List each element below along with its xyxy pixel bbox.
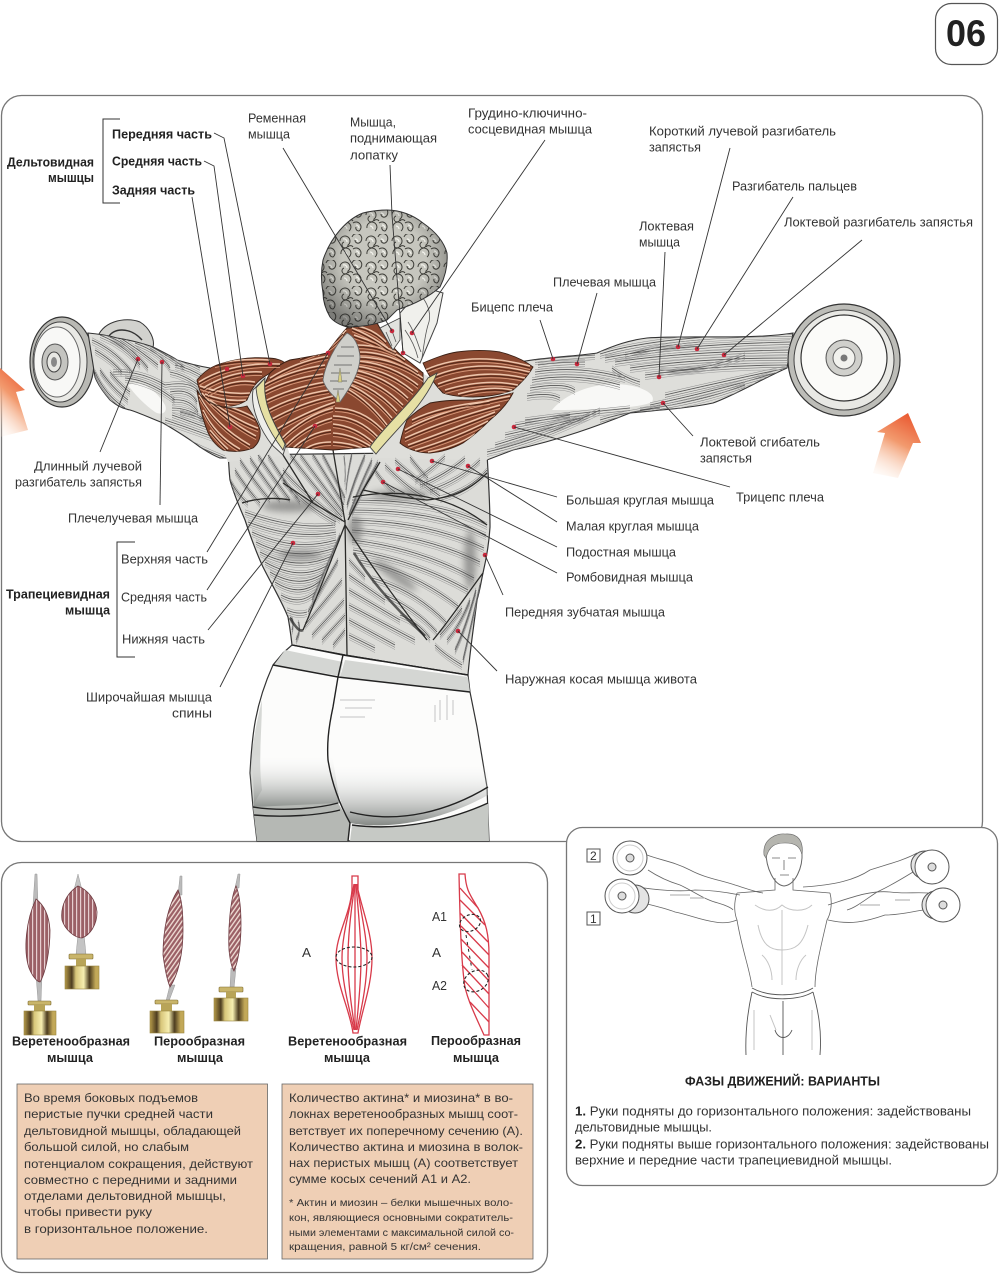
labels: deltoid: Передняя часть bbox=[112, 126, 212, 142]
labels: trapezius: мышца bbox=[65, 602, 111, 618]
trapezius muscle bbox=[262, 323, 423, 450]
heading: movement phases: ФАЗЫ ДВИЖЕНИЙ: ВАРИАНТЫ bbox=[685, 1074, 880, 1088]
text box: actin and myosin: сумме косых сечений А1 и А2. bbox=[289, 1172, 471, 1186]
arms position 2 bbox=[647, 853, 917, 910]
captions: muscle types: Перообразная bbox=[154, 1034, 245, 1048]
text box: actin and myosin: кращения, равной 5 кг/см² сечения. bbox=[289, 1242, 481, 1253]
left deltoid bbox=[197, 358, 285, 451]
number box 1 bbox=[587, 912, 600, 926]
torso shading bbox=[260, 486, 480, 594]
right arm bbox=[470, 333, 793, 460]
muscle fibres brown bbox=[199, 326, 530, 456]
labels: trapezius: Нижняя часть bbox=[122, 632, 205, 646]
labels: deltoid: Средняя часть bbox=[112, 154, 202, 168]
text box: actin and myosin: Количество актина* и миозина* в во- bbox=[289, 1091, 513, 1105]
deep shadow lines bbox=[290, 553, 425, 636]
labels: left arm: разгибатель запястья bbox=[15, 474, 142, 490]
page number badge: 06 bbox=[946, 13, 986, 54]
panel: main anatomy bbox=[2, 96, 982, 842]
right dumbbell bbox=[788, 304, 900, 416]
scapula spines bbox=[253, 373, 437, 455]
labels: right side muscles: Локтевой сгибатель bbox=[700, 434, 820, 450]
labels: right side muscles: Передняя зубчатая мышца bbox=[505, 604, 666, 620]
labels: trapezius: спины bbox=[172, 706, 212, 720]
text box: actin and myosin bbox=[282, 1084, 533, 1259]
labels: right side muscles: запястья bbox=[700, 450, 752, 466]
small dumbbells bbox=[605, 841, 960, 922]
captions: muscle types: мышца bbox=[324, 1050, 371, 1065]
text box: lateral raises: Во время боковых подъемов bbox=[24, 1091, 198, 1105]
left arm bbox=[88, 333, 240, 458]
torso outline bbox=[735, 878, 831, 1055]
labels: trapezius: Средняя часть bbox=[121, 590, 207, 604]
labels: top muscles: Плечевая мышца bbox=[553, 274, 657, 290]
ear and neck side bbox=[380, 287, 443, 363]
labels: top muscles: Локтевой разгибатель запястья bbox=[784, 214, 973, 230]
labels: trapezius bbox=[6, 552, 213, 720]
labels: top muscles bbox=[248, 106, 973, 314]
leader lines bbox=[100, 133, 862, 687]
bracket: deltoid group bbox=[103, 119, 120, 203]
captions: muscle types: мышца bbox=[177, 1050, 224, 1065]
number box 2: 2 bbox=[590, 849, 597, 863]
text box: lateral raises: большой силой, но слабым bbox=[24, 1140, 189, 1154]
labels: left arm: Плечелучевая мышца bbox=[68, 510, 199, 526]
captions: muscle types: мышца bbox=[453, 1050, 500, 1065]
arms position 1 bbox=[638, 887, 928, 923]
diagram: fusiform muscle section bbox=[302, 876, 372, 1033]
gray muscle fibres bbox=[92, 332, 793, 670]
illustration: pennate muscle long bbox=[150, 876, 184, 1033]
labels: top muscles: Локтевая bbox=[639, 218, 694, 234]
diagram: pennate muscle section: А1 bbox=[432, 909, 447, 924]
labels: top muscles: Короткий лучевой разгибатель bbox=[649, 124, 836, 138]
text box: lateral raises: совместно с передними и задними bbox=[24, 1173, 237, 1187]
text box: actin and myosin: кон, являющиеся основными сократитель- bbox=[289, 1213, 513, 1224]
number box 2 bbox=[587, 849, 600, 863]
labels: right side muscles: Малая круглая мышца bbox=[566, 518, 700, 534]
labels: top muscles: мышца bbox=[248, 126, 291, 142]
labels: deltoid bbox=[7, 126, 212, 198]
labels: top muscles: Грудино-ключично- bbox=[468, 106, 587, 120]
text box: actin and myosin: нах перистых мышц (А) соответствует bbox=[289, 1156, 519, 1170]
number box 1: 1 bbox=[590, 912, 597, 926]
text box: lateral raises: перистые пучки средней части bbox=[24, 1107, 213, 1121]
text box: actin and myosin: локнах веретенообразных мышц соот- bbox=[289, 1107, 518, 1121]
labels: right side muscles: Большая круглая мышца bbox=[566, 492, 715, 508]
labels: trapezius: Верхняя часть bbox=[121, 552, 208, 566]
shorts bbox=[250, 645, 489, 841]
labels: left arm: Длинный лучевой bbox=[34, 458, 142, 474]
labels: trapezius: Широчайшая мышца bbox=[86, 690, 213, 704]
text: movement phases: 1. Руки подняты до горизонтального положения: задействованы bbox=[575, 1104, 971, 1118]
labels: deltoid: Задняя часть bbox=[112, 182, 195, 198]
labels: top muscles: мышца bbox=[639, 234, 681, 250]
text: movement phases: верхние и передние части трапециевидной мышцы. bbox=[575, 1152, 892, 1168]
text box: actin and myosin: Количество актина и миозина в волок- bbox=[289, 1140, 523, 1154]
head bbox=[764, 834, 802, 886]
captions: muscle types bbox=[12, 1033, 521, 1065]
diagram: pennate muscle section bbox=[432, 874, 492, 1035]
text: movement phases: дельтовидные мышцы. bbox=[575, 1120, 712, 1134]
labels: top muscles: лопатку bbox=[350, 148, 399, 162]
labels: right side muscles: Трицепс плеча bbox=[736, 490, 825, 504]
captions: muscle types: Веретенообразная bbox=[12, 1034, 130, 1048]
cervical spine tendon bbox=[323, 333, 360, 402]
page number badge bbox=[936, 4, 998, 64]
labels: top muscles: сосцевидная мышца bbox=[468, 122, 593, 136]
torso bbox=[228, 452, 490, 675]
labels: right side muscles: Ромбовидная мышца bbox=[566, 570, 694, 584]
text: movement phases bbox=[575, 1104, 989, 1168]
illustration: fusiform muscle short bbox=[62, 874, 99, 989]
labels: top muscles: Разгибатель пальцев bbox=[732, 178, 857, 194]
panel: muscle types bbox=[2, 862, 548, 1272]
labels: top muscles: Мышца, bbox=[350, 114, 396, 130]
shoulder backing bbox=[200, 372, 530, 462]
text box: actin and myosin: ветствует их поперечному сечению (А). bbox=[289, 1124, 523, 1138]
diagram: fusiform muscle section: А bbox=[302, 945, 311, 960]
labels: left arm bbox=[15, 458, 199, 526]
labels: right side muscles bbox=[505, 434, 825, 686]
captions: muscle types: Веретенообразная bbox=[288, 1034, 407, 1048]
text box: actin and myosin: ными элементами с максимальной силой со- bbox=[289, 1228, 514, 1239]
diagram: pennate muscle section: А bbox=[432, 945, 441, 960]
labels: top muscles: поднимающая bbox=[350, 130, 437, 146]
illustration: pennate muscle short bbox=[214, 874, 248, 1021]
labels: trapezius: Трапециевидная bbox=[6, 586, 110, 602]
arrow: right dumbbell direction bbox=[873, 413, 921, 478]
labels: deltoid: мышцы bbox=[48, 170, 94, 185]
labels: right side muscles: Подостная мышца bbox=[566, 544, 677, 560]
right deltoid bbox=[400, 350, 533, 453]
labels: right side muscles: Наружная косая мышца живота bbox=[505, 672, 698, 686]
labels: top muscles: запястья bbox=[649, 140, 701, 154]
arrow: left dumbbell direction bbox=[0, 368, 28, 437]
left dumbbell bbox=[30, 317, 153, 407]
text box: lateral raises bbox=[17, 1084, 268, 1259]
text box: lateral raises: в горизонтальное положение. bbox=[24, 1222, 208, 1236]
diagram: pennate muscle section: А2 bbox=[432, 978, 447, 993]
head hair bbox=[322, 210, 447, 327]
text box: lateral raises: отделами дельтовидной мышцы, bbox=[24, 1189, 226, 1203]
red marker dots bbox=[136, 329, 726, 633]
labels: top muscles: Ременная bbox=[248, 110, 306, 126]
text box: lateral raises: потенциалом сокращения, действуют bbox=[24, 1157, 254, 1171]
text box: lateral raises: чтобы привести руку bbox=[24, 1205, 152, 1219]
captions: muscle types: Перообразная bbox=[431, 1033, 521, 1048]
labels: deltoid: Дельтовидная bbox=[7, 154, 94, 170]
panel: movement phases bbox=[566, 828, 998, 1186]
illustration: fusiform muscle long bbox=[24, 874, 56, 1035]
labels: top muscles: Бицепс плеча bbox=[471, 300, 554, 314]
text box: actin and myosin: * Актин и миозин – белки мышечных воло- bbox=[289, 1197, 513, 1209]
bracket: trapezius group bbox=[117, 542, 135, 657]
text box: lateral raises: дельтовидной мышцы, обладающей bbox=[24, 1124, 241, 1138]
text: movement phases: 2. Руки подняты выше горизонтального положения: задействованы bbox=[575, 1136, 989, 1152]
captions: muscle types: мышца bbox=[47, 1050, 94, 1065]
illustration: back muscles figure bbox=[30, 210, 900, 841]
illustration: standing figure with dumbbells bbox=[587, 834, 960, 1055]
muscle boundaries bbox=[242, 450, 487, 655]
